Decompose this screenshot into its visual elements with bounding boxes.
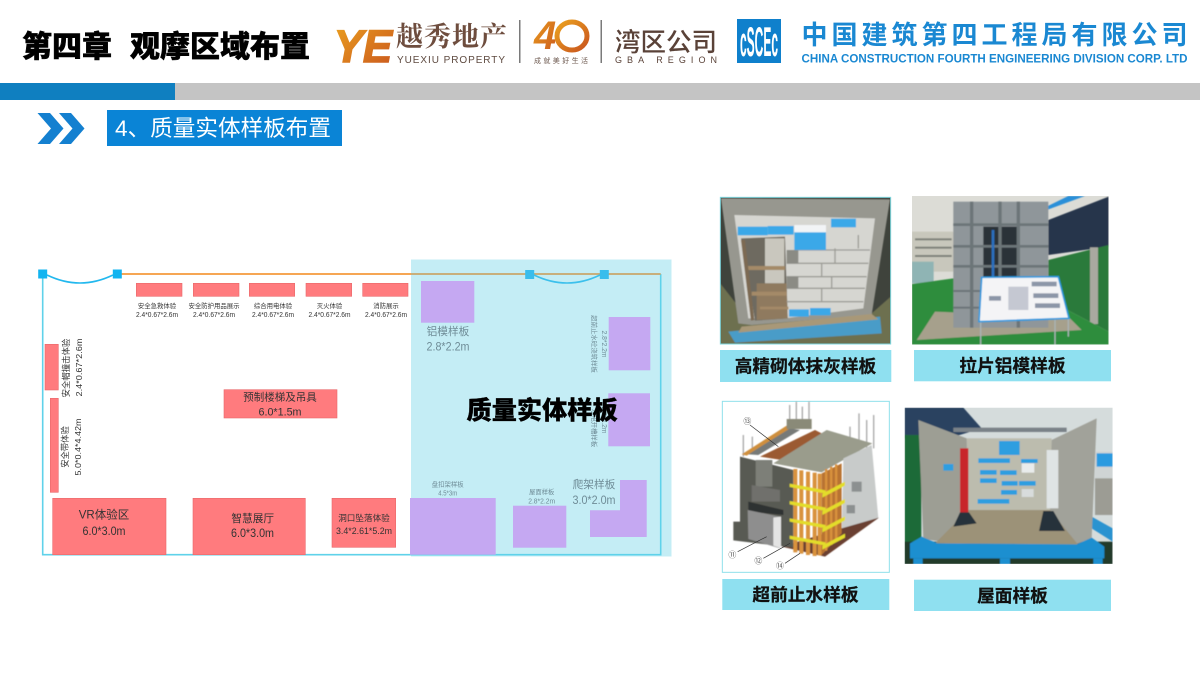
sample: aluminium formwork: 铝模样板 bbox=[427, 325, 470, 338]
logo: GBA region: 湾区公司 bbox=[615, 29, 717, 57]
sample: climbing scaffold bbox=[572, 478, 647, 537]
logo: Yuexiu Property bbox=[334, 15, 507, 72]
logo: Yuexiu Property: 越秀地产 bbox=[396, 15, 507, 54]
exhibit: smart hall: 6.0*3.0m bbox=[231, 528, 274, 540]
photo: advance water stop sample bbox=[722, 401, 889, 572]
sample: aluminium formwork bbox=[421, 281, 474, 354]
sample: MEP chase bbox=[590, 393, 650, 448]
sample: advance water stop: 2.8*2.2m bbox=[600, 330, 607, 358]
header band bbox=[0, 83, 1200, 100]
logo: 40th anniversary: 4 bbox=[533, 14, 556, 58]
sample: disc scaffold: 4.5*3m bbox=[438, 490, 457, 498]
exhibit: electrical safety: 2.4*0.67*2.6m bbox=[252, 312, 294, 319]
label: roof sample: 屋面样板 bbox=[977, 586, 1048, 606]
exhibit: safety belt: 5.0*0.4*4.42m bbox=[73, 418, 83, 476]
exhibit: safety belt bbox=[50, 398, 83, 492]
logo divider bbox=[600, 20, 602, 63]
exhibit: safety belt: 安全带体验 bbox=[60, 426, 70, 468]
exhibit: protective equipment bbox=[188, 283, 240, 319]
exhibit: fire escape: 消防展示 bbox=[373, 301, 399, 310]
exhibit: opening fall: 洞口坠落体验 bbox=[338, 512, 390, 523]
sample: roof: 2.8*2.2m bbox=[528, 498, 555, 506]
exhibit: opening fall bbox=[332, 498, 396, 547]
exhibit: electrical safety bbox=[249, 283, 295, 319]
header: title: 第四章 bbox=[22, 30, 112, 64]
text: cSCEc bbox=[740, 18, 778, 65]
exhibit: fire extinguishing: 2.4*0.67*2.6m bbox=[308, 312, 351, 319]
sample: climbing scaffold: 3.0*2.0m bbox=[572, 495, 616, 507]
logo: Yuexiu Property: YE bbox=[334, 21, 394, 72]
exhibit: fire extinguishing: 灭火体验 bbox=[317, 301, 343, 310]
label: roof sample bbox=[914, 580, 1111, 611]
section heading bbox=[107, 110, 342, 146]
logo divider bbox=[519, 20, 520, 63]
callout numbers: ⑪ bbox=[728, 550, 736, 559]
exhibit: precast stairs bbox=[224, 390, 337, 418]
header: title: 观摩区域布置 bbox=[130, 31, 310, 64]
sample: MEP chase: 水电开槽样板 bbox=[590, 409, 599, 448]
exhibit: smart hall: 智慧展厅 bbox=[231, 512, 274, 525]
sample: MEP chase: 2.8*2.2m bbox=[600, 406, 607, 434]
header: title bbox=[22, 30, 310, 64]
exhibit: protective equipment: 安全防护用品展示 bbox=[188, 301, 240, 310]
sample: aluminium formwork: 2.8*2.2m bbox=[426, 342, 470, 354]
exhibit: helmet impact: 安全帽撞击体验 bbox=[61, 338, 71, 397]
section heading: 4、质量实体样板布置 bbox=[115, 116, 331, 141]
exhibit: precast stairs: 预制楼梯及吊具 bbox=[243, 390, 317, 404]
label: masonry plaster sample: 高精砌体抹灰样板 bbox=[735, 355, 877, 376]
exhibit: VR area bbox=[53, 498, 166, 555]
logo: 40th anniversary: 成就美好生活 bbox=[534, 56, 588, 65]
panel: quality sample zone bbox=[411, 260, 672, 556]
exhibit: fire extinguishing bbox=[306, 283, 352, 319]
sample: advance water stop: 超前止水砼浇筑样板 bbox=[590, 315, 599, 373]
exhibit: electrical safety: 综合用电体验 bbox=[254, 301, 293, 310]
callout numbers: ⑭ bbox=[776, 562, 784, 571]
label: advance water stop sample bbox=[722, 579, 889, 610]
exhibit: fire escape bbox=[363, 283, 408, 319]
exhibit: opening fall: 3.4*2.61*5.2m bbox=[336, 526, 392, 536]
label: advance water stop sample: 超前止水样板 bbox=[752, 585, 859, 605]
sample: roof bbox=[513, 487, 566, 548]
label: masonry plaster sample bbox=[720, 350, 891, 382]
sample: disc scaffold: 盘扣架样板 bbox=[432, 480, 464, 488]
icon: double chevron bbox=[38, 113, 84, 144]
zone title: 质量实体样板 bbox=[466, 396, 618, 425]
sample: climbing scaffold: 爬架样板 bbox=[573, 478, 616, 491]
exhibit: VR area: VR体验区 bbox=[79, 508, 129, 522]
sample: roof: 屋面样板 bbox=[529, 487, 555, 496]
photo: masonry plaster sample bbox=[720, 197, 891, 344]
callout numbers: ⑫ bbox=[754, 557, 762, 566]
sample: advance water stop bbox=[590, 315, 650, 373]
logo: China Construction Fourth Engineering Division: CHINA CONSTRUCTION FOURTH ENGINEERING DIVISION CORP. LTD bbox=[802, 54, 1188, 66]
label: aluminium formwork sample: 拉片铝模样板 bbox=[959, 355, 1066, 376]
callout numbers: ⑬ bbox=[743, 417, 751, 426]
exhibit: smart hall bbox=[193, 498, 305, 555]
exhibit: safety first aid: 2.4*0.67*2.6m bbox=[136, 312, 178, 319]
logo: Yuexiu Property: YUEXIU PROPERTY bbox=[397, 55, 505, 66]
sample: disc scaffold bbox=[410, 480, 496, 555]
exhibit: safety first aid: 安全急救体验 bbox=[138, 301, 177, 310]
callout numbers bbox=[728, 417, 784, 571]
label: aluminium formwork sample bbox=[914, 350, 1111, 381]
photo: aluminium formwork sample bbox=[912, 196, 1109, 345]
exhibit: VR area: 6.0*3.0m bbox=[82, 526, 126, 538]
floor plan bbox=[38, 260, 671, 556]
exhibit: fire escape: 2.4*0.67*2.6m bbox=[365, 312, 407, 319]
plan walls bbox=[43, 274, 661, 555]
exhibit: helmet impact bbox=[45, 338, 84, 397]
logo: 40th anniversary bbox=[533, 14, 588, 65]
logo: GBA region: GBA REGION bbox=[615, 55, 717, 65]
exhibit: precast stairs: 6.0*1.5m bbox=[258, 406, 302, 418]
door markers bbox=[38, 270, 609, 279]
callout lines bbox=[738, 425, 800, 563]
exhibit: safety first aid bbox=[136, 283, 182, 319]
logo: China Construction Fourth Engineering Division bbox=[802, 20, 1188, 66]
exhibit: helmet impact: 2.4*0.67*2.6m bbox=[74, 338, 84, 396]
logo: CSCEC mark bbox=[737, 18, 781, 65]
logo: China Construction Fourth Engineering Division: 中国建筑第四工程局有限公司 bbox=[802, 20, 1188, 50]
exhibit: protective equipment: 2.4*0.67*2.6m bbox=[193, 312, 235, 319]
photo: roof sample bbox=[905, 408, 1113, 564]
